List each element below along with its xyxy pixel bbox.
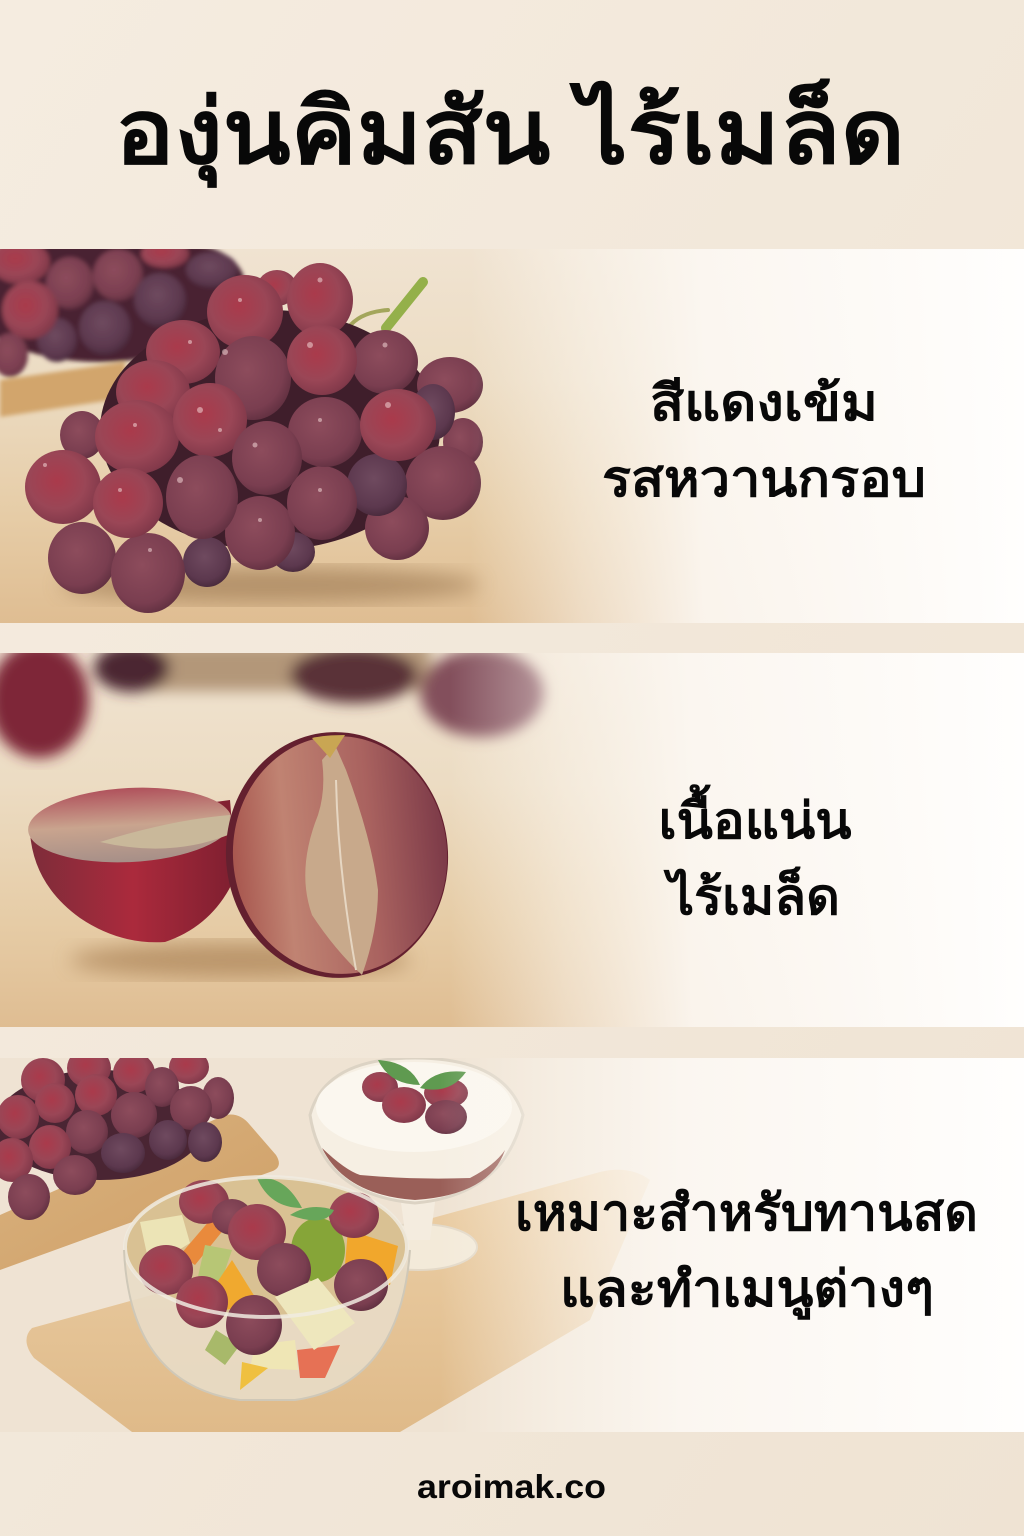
half grape lying — [26, 783, 236, 942]
dessert glass — [310, 1058, 523, 1270]
caption: รสหวานกรอบ — [602, 451, 926, 507]
footer url: aroimak.co — [417, 1468, 606, 1505]
half grape standing — [226, 732, 448, 978]
grape bunch — [25, 263, 483, 613]
shadow under halves — [70, 942, 410, 978]
panel background — [0, 1058, 68, 1104]
title: องุ่นคิมสัน ไร้เมล็ด — [115, 77, 905, 189]
bunch shadow core — [100, 310, 440, 550]
fade to white at right — [440, 1058, 1024, 1432]
fade to white at right — [470, 249, 1024, 623]
fruit bowl — [124, 1177, 410, 1400]
panel: fresh eating and menus — [0, 1048, 1024, 1432]
fruit pieces — [140, 1215, 398, 1390]
cutting board — [26, 1170, 650, 1432]
caption — [515, 1185, 978, 1320]
caption: ไร้เมล็ด — [663, 866, 840, 925]
panel: deep red sweet crisp grapes — [0, 238, 1024, 623]
icon: grape stem — [348, 282, 423, 328]
glass rim — [125, 1177, 407, 1317]
grapes in bowl — [139, 1180, 388, 1355]
fade to white at right — [450, 653, 1024, 1027]
caption — [658, 784, 852, 925]
caption: และทำเมนูต่างๆ — [560, 1261, 934, 1320]
water droplets — [43, 278, 391, 552]
caption: เหมาะสำหรับทานสด — [515, 1185, 978, 1241]
shadow under bunch — [60, 567, 480, 603]
caption: เนื้อแน่น — [658, 784, 852, 849]
back grape bunch — [0, 1048, 234, 1220]
panel: firm flesh seedless — [0, 642, 1024, 1027]
blurred back grapes — [0, 642, 544, 758]
caption: สีแดงเข้ม — [650, 375, 878, 431]
caption — [602, 375, 926, 507]
back tray with blurred grapes — [0, 238, 245, 417]
panel background wood — [0, 249, 692, 623]
back tray — [0, 1114, 279, 1270]
panel background wood — [0, 653, 680, 1027]
